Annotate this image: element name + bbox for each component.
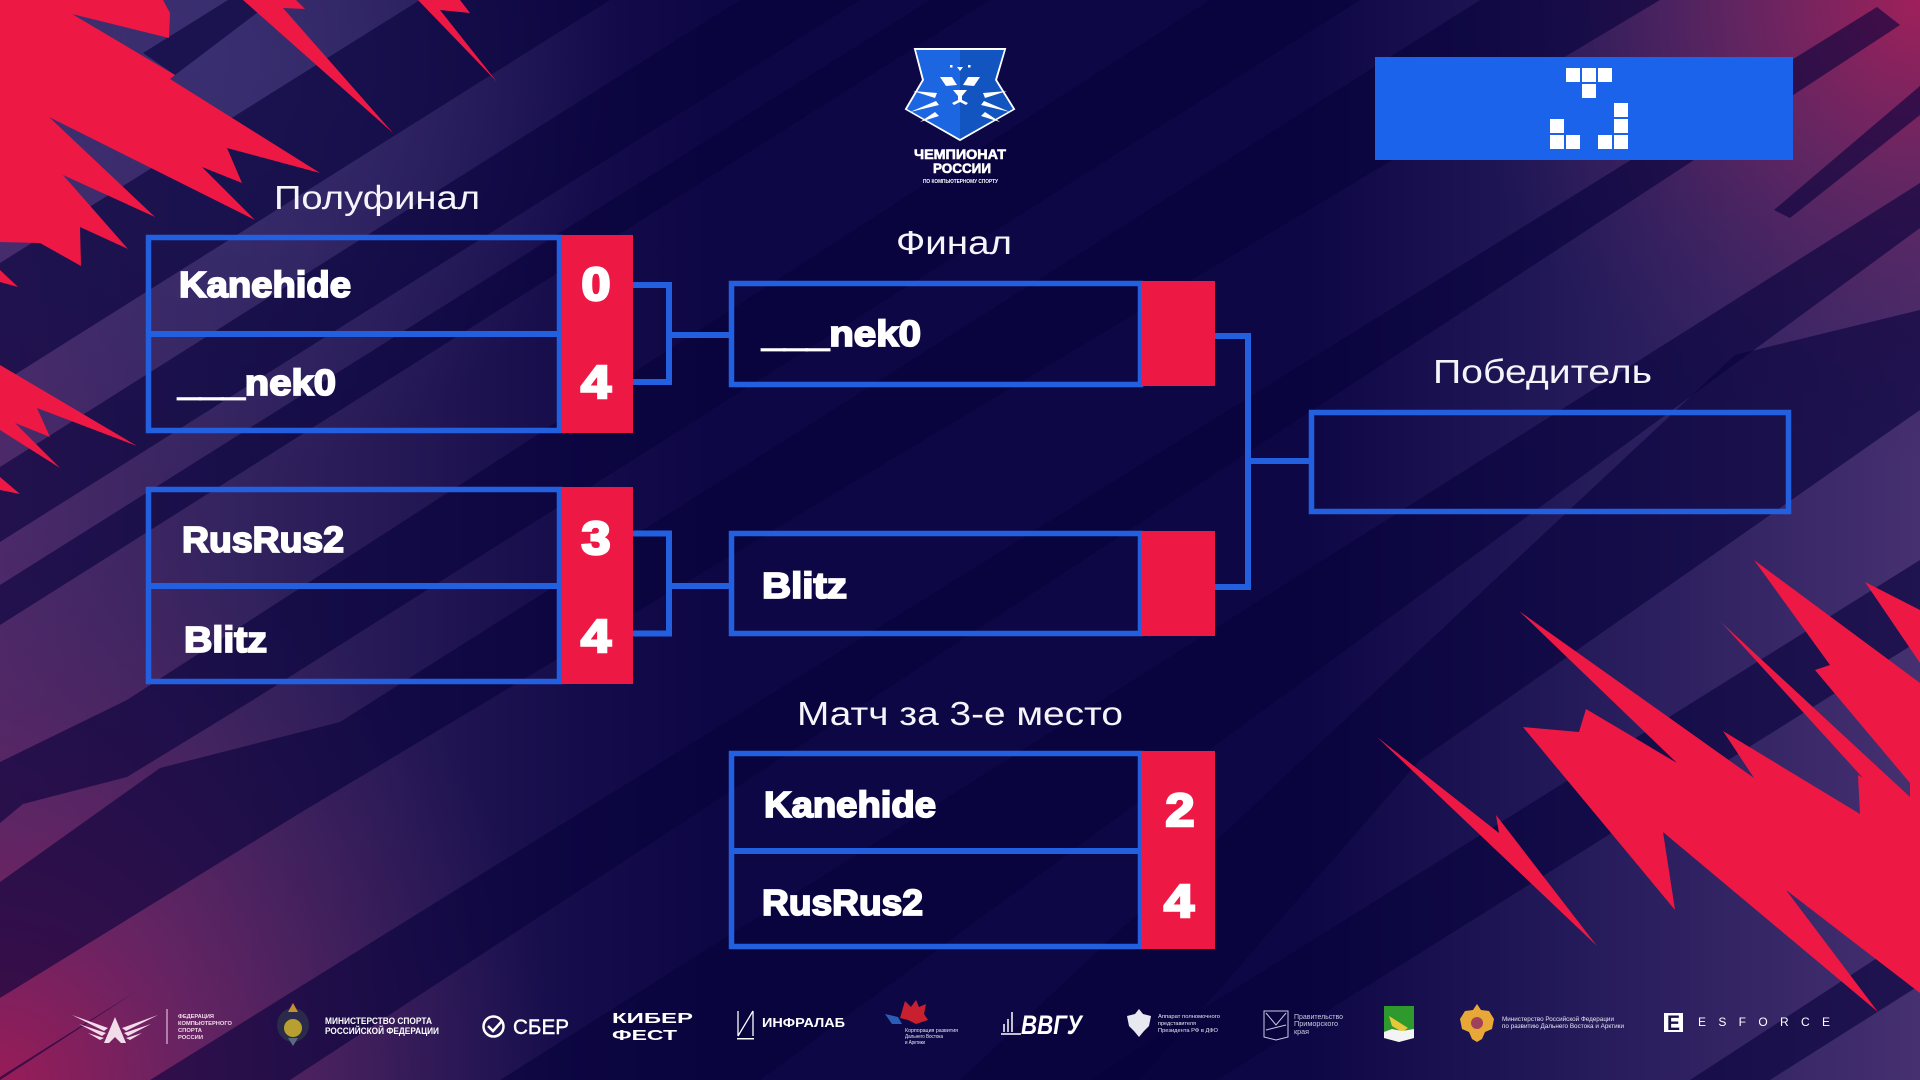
- connector: semifinal 2 to final: [633, 534, 729, 634]
- logo: federation: [72, 1009, 233, 1044]
- logo: primorsky government: [1264, 1011, 1343, 1040]
- logo small line: ПО КОМПЬЮТЕРНОМУ СПОРТУ: [923, 179, 999, 185]
- logo: primorsky government: Приморского: [1294, 1019, 1338, 1028]
- logo: infralab: ИНФРАЛАБ: [762, 1015, 845, 1030]
- logo: cyberfest: КИБЕР: [612, 1010, 693, 1027]
- logo subtitle: РОССИИ: [933, 160, 991, 176]
- logo: sber: СБЕР: [513, 1016, 569, 1039]
- player: ___nek0: ___nek0: [761, 313, 921, 354]
- logo: vvgu: [1001, 1010, 1083, 1040]
- score 0: 0: [582, 258, 610, 310]
- panel: third place match: [729, 751, 1215, 949]
- logo: far east ministry: Министерство Российской Федерации: [1502, 1016, 1614, 1023]
- logo: esforce: E: [1667, 1012, 1680, 1035]
- logo: presidential envoy: представителя: [1158, 1021, 1196, 1027]
- logo: city crest: [1384, 1006, 1414, 1042]
- score 4: 4: [581, 610, 611, 662]
- heading: winner: Победитель: [1433, 353, 1652, 390]
- logo: presidential envoy: Президента РФ в ДФО: [1158, 1028, 1219, 1034]
- logo: ministry of sport: РОССИЙСКОЙ ФЕДЕРАЦИИ: [325, 1025, 439, 1036]
- player: RusRus2: RusRus2: [762, 882, 923, 923]
- logo: far east corporation: Дальнего Востока: [905, 1034, 943, 1040]
- logo: infralab: [737, 1011, 845, 1040]
- score 4: 4: [1164, 875, 1194, 927]
- logo: primorsky government: Правительство: [1294, 1012, 1343, 1021]
- logo: ministry of sport: МИНИСТЕРСТВО СПОРТА: [325, 1016, 432, 1026]
- player: RusRus2: RusRus2: [182, 519, 344, 560]
- logo: esforce: ESFORCE: [1698, 1015, 1830, 1029]
- logo: cyberfest: [612, 1010, 693, 1044]
- logo: far east ministry: по развитию Дальнего Востока и Арктики: [1502, 1024, 1624, 1030]
- panel: semifinal 1: [146, 235, 633, 433]
- logo: far east ministry: [1460, 1004, 1624, 1042]
- logo: far east corporation: Корпорация развития: [905, 1028, 958, 1034]
- logo: federation: ФЕДЕРАЦИЯ: [178, 1014, 214, 1020]
- heading: semifinal: Полуфинал: [274, 179, 480, 216]
- score 3: 3: [582, 512, 610, 564]
- panel: final slot 2: [732, 531, 1215, 636]
- connector: final to winner: [1215, 336, 1309, 587]
- logo: federation: СПОРТА: [178, 1028, 202, 1034]
- score 4: 4: [581, 356, 611, 408]
- shield: [906, 49, 1014, 140]
- logo: federation: КОМПЬЮТЕРНОГО: [178, 1021, 233, 1027]
- lion face: [910, 65, 1010, 122]
- panel: final slot 1: [732, 281, 1215, 386]
- player: ___nek0: ___nek0: [177, 362, 336, 403]
- logo: vvgu: ВВГУ: [1021, 1010, 1083, 1040]
- logo: far east corporation: [885, 1000, 958, 1046]
- connector: semifinal 1 to final: [633, 285, 729, 382]
- sponsor strip: [72, 1000, 1830, 1046]
- logo title: ЧЕМПИОНАТ: [914, 146, 1006, 162]
- heading: third place match: Матч за 3-е место: [797, 695, 1123, 732]
- logo: primorsky government: края: [1294, 1027, 1309, 1036]
- heading: final: Финал: [896, 224, 1012, 261]
- red shards bottom right: [1377, 560, 1920, 1012]
- player: Kanehide: Kanehide: [179, 264, 351, 305]
- player: Kanehide: Kanehide: [764, 784, 936, 825]
- panel: winner: [1312, 412, 1788, 512]
- blue banner with pixel marks: [1375, 57, 1793, 160]
- logo: presidential envoy: Аппарат полномочного: [1158, 1014, 1220, 1020]
- championship logo: [906, 49, 1014, 185]
- logo: far east corporation: и Арктики: [905, 1040, 925, 1046]
- player: Blitz: Blitz: [184, 619, 267, 660]
- logo: esforce: [1664, 1012, 1830, 1035]
- logo: federation: РОССИИ: [178, 1035, 203, 1041]
- logo: presidential envoy: [1127, 1009, 1220, 1037]
- score 2: 2: [1166, 784, 1194, 836]
- panel: semifinal 2: [146, 487, 633, 684]
- logo: ministry of sport: [277, 1003, 439, 1046]
- logo: cyberfest: ФЕСТ: [612, 1027, 677, 1044]
- player: Blitz: Blitz: [762, 565, 847, 606]
- red shards top left: [0, 0, 497, 494]
- logo: sber: [484, 1016, 569, 1039]
